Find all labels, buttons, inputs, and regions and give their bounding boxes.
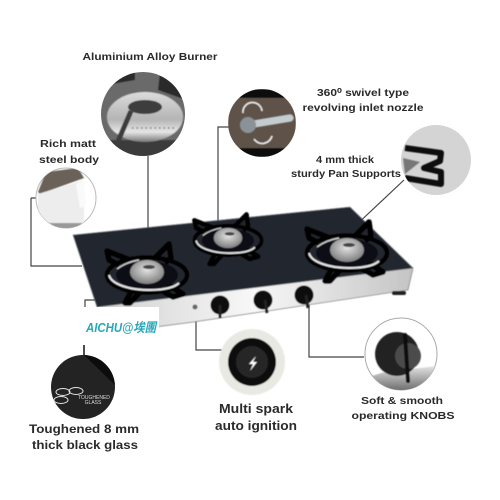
label: knobs xyxy=(352,395,454,422)
callout photo: nozzle xyxy=(228,89,296,157)
connector lines xyxy=(31,127,404,358)
knob 2 xyxy=(254,290,272,313)
label: glass: Toughened 8 mm xyxy=(29,422,139,436)
label: knobs: operating KNOBS xyxy=(352,410,454,422)
callout photo: pan support xyxy=(401,125,471,195)
ignition button xyxy=(192,304,198,310)
callout photo: toughened glass xyxy=(51,355,115,419)
burner left xyxy=(107,244,187,303)
watermark: AICHU@埃團 xyxy=(85,320,158,335)
label: ignition: Multi spark xyxy=(219,401,294,416)
callout photo: steel body xyxy=(36,168,96,230)
foot xyxy=(392,291,406,295)
watermark xyxy=(84,307,159,345)
label: pan supports: sturdy Pan Supports xyxy=(291,168,401,180)
knob 1 xyxy=(210,296,230,318)
knob 3 xyxy=(294,286,314,308)
callout photo: ignition xyxy=(219,329,285,395)
label: steel body: steel body xyxy=(39,154,99,166)
label: ignition xyxy=(215,401,297,433)
labels xyxy=(29,51,454,452)
label: glass xyxy=(29,422,139,452)
label: knobs: Soft & smooth xyxy=(361,395,443,407)
label: pan supports xyxy=(291,154,401,180)
icon: spark xyxy=(249,356,257,371)
callout photo: burner xyxy=(100,71,186,158)
callout photo: knob xyxy=(365,318,437,392)
steel body xyxy=(97,268,413,333)
callout photo: toughened glass: TOUGHENED xyxy=(78,395,110,401)
burner middle xyxy=(194,214,262,264)
glass top xyxy=(73,207,413,307)
label: burner: Aluminium Alloy Burner xyxy=(82,51,218,63)
glass logo xyxy=(54,388,83,404)
callout photo: toughened glass: GLASS xyxy=(85,400,102,406)
burner right xyxy=(307,222,387,281)
label: steel body xyxy=(39,138,99,166)
label: nozzle: revolving inlet nozzle xyxy=(302,102,424,114)
label: glass: thick black glass xyxy=(32,438,138,452)
label: nozzle xyxy=(302,87,424,114)
label: nozzle: 360⁰ swivel type xyxy=(317,87,409,99)
label: pan supports: 4 mm thick xyxy=(316,154,374,166)
label: ignition: auto ignition xyxy=(215,418,297,433)
cooktop xyxy=(73,207,413,333)
label: steel body: Rich matt xyxy=(40,138,97,150)
